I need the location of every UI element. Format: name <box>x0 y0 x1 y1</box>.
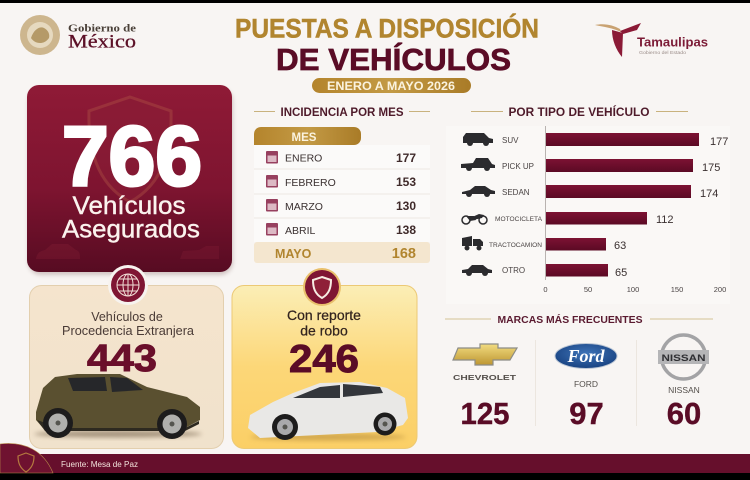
government of Mexico logo: Gobierno de <box>68 22 136 34</box>
May highlighted row <box>254 242 430 263</box>
row values: 177 <box>396 151 416 165</box>
row values <box>396 151 416 237</box>
date range pill: ENERO A MAYO 2026 <box>327 81 455 93</box>
brand: Ford: 97 <box>569 396 604 431</box>
category labels: MOTOCICLETA <box>495 216 543 223</box>
footer bar <box>0 443 750 473</box>
category labels: SEDAN <box>502 188 530 197</box>
row values: 130 <box>396 199 416 213</box>
bar values: 174 <box>700 188 718 200</box>
table: monthly incidence: 168 <box>392 246 416 262</box>
card label: Con reporte <box>287 307 361 323</box>
Tamaulipas logo <box>595 23 708 57</box>
month header <box>254 127 361 145</box>
brand: Chevrolet <box>453 344 517 431</box>
card number: 443 <box>87 338 157 380</box>
panel: reported stolen <box>232 286 417 448</box>
vehicle image: white hatchback <box>248 382 408 440</box>
government of Mexico logo: México <box>68 32 136 52</box>
total label: Vehículos <box>72 192 186 220</box>
axis ticks <box>543 285 726 294</box>
divider <box>636 340 638 426</box>
divider <box>534 340 536 426</box>
row labels: MARZO <box>285 201 323 213</box>
axis ticks: 100 <box>627 285 639 294</box>
icons <box>461 133 495 276</box>
icon: footer shield <box>18 453 34 472</box>
total label: Asegurados <box>62 216 200 244</box>
icon: Nissan badge <box>662 335 706 379</box>
bar values: 177 <box>710 136 728 148</box>
Tamaulipas logo: Tamaulipas <box>637 36 708 50</box>
bar values: 175 <box>702 162 720 174</box>
row labels: ABRIL <box>285 225 316 237</box>
table: monthly incidence <box>254 127 430 263</box>
panel: total vehicles seized <box>27 85 233 275</box>
title <box>235 14 539 77</box>
axis ticks: 50 <box>584 285 592 294</box>
bar values <box>614 136 728 279</box>
icon: shield badge <box>303 268 341 306</box>
title: DE VEHÍCULOS <box>276 42 511 77</box>
row values: 153 <box>396 175 416 189</box>
table: monthly incidence: MES <box>292 132 317 144</box>
government of Mexico logo <box>20 15 136 55</box>
card label: Procedencia Extranjera <box>62 324 194 338</box>
total number: 766 <box>62 109 202 203</box>
row labels: ENERO <box>285 152 322 164</box>
brand: Nissan: NISSAN <box>668 385 700 395</box>
bar values: 112 <box>656 214 674 226</box>
category labels <box>489 136 543 275</box>
category labels: OTRO <box>502 266 525 275</box>
panel: foreign-origin vehicles <box>30 286 224 448</box>
category labels: SUV <box>502 136 519 145</box>
icon: Chevrolet bowtie <box>453 344 517 365</box>
vehicle image: olive SUV <box>34 374 202 439</box>
category labels: PICK UP <box>502 162 534 171</box>
row icons <box>266 151 278 236</box>
bar values: 65 <box>615 267 627 279</box>
heading: by vehicle type: POR TIPO DE VEHÍCULO <box>508 106 650 119</box>
footer corner tab <box>0 443 53 473</box>
brand: Nissan: NISSAN <box>662 353 706 364</box>
Tamaulipas logo: Gobierno del Estado <box>639 50 687 55</box>
icon: globe badge <box>108 265 148 305</box>
heading: most frequent brands: MARCAS MÁS FRECUENTES <box>498 313 642 326</box>
row labels <box>285 152 336 237</box>
axis ticks: 0 <box>543 285 548 294</box>
source text: Fuente: Mesa de Paz <box>61 460 138 469</box>
row labels: FEBRERO <box>285 177 336 189</box>
date range pill <box>312 78 471 93</box>
brand: Ford: Ford <box>566 346 606 366</box>
heading: incidence by month: INCIDENCIA POR MES <box>280 107 404 119</box>
row values: 138 <box>396 223 416 237</box>
bar values: 63 <box>614 240 626 252</box>
axis ticks: 150 <box>671 285 683 294</box>
icon: Ford oval <box>555 344 617 368</box>
brand: Ford: FORD <box>574 379 598 389</box>
bar chart: vehicle types <box>446 126 730 304</box>
brand: Chevrolet: 125 <box>460 396 510 431</box>
title: PUESTAS A DISPOSICIÓN <box>235 14 539 44</box>
card label: Vehículos de <box>91 310 163 324</box>
axis ticks: 200 <box>714 285 726 294</box>
card number: 246 <box>289 338 359 381</box>
category labels: TRACTOCAMION <box>489 242 542 249</box>
brand: Nissan <box>658 335 709 431</box>
bars <box>546 133 699 276</box>
card label: de robo <box>300 322 348 338</box>
brand: Ford <box>555 344 617 431</box>
brand: Chevrolet: CHEVROLET <box>453 373 517 382</box>
brand: Nissan: 60 <box>667 396 701 431</box>
table: monthly incidence: MAYO <box>275 247 312 261</box>
